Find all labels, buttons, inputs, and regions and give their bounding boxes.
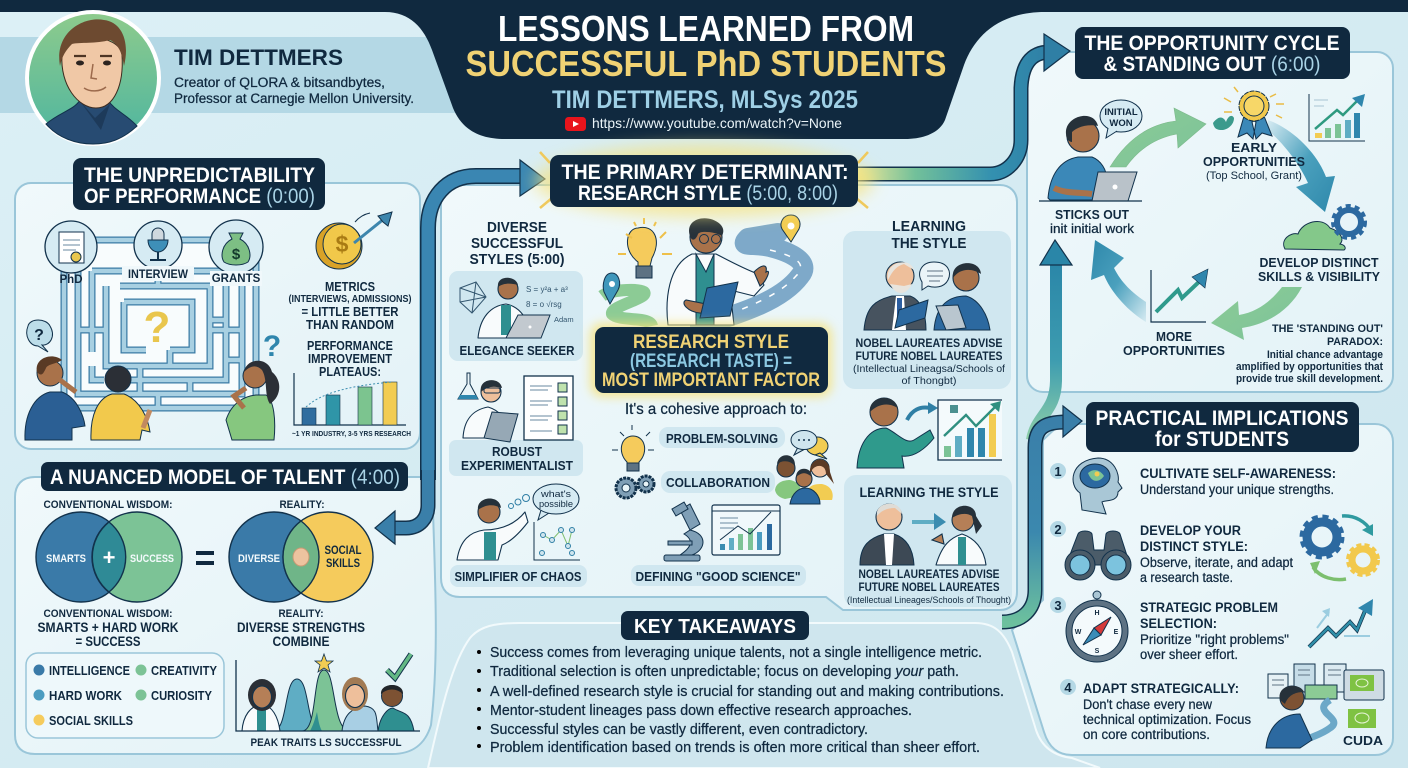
maze question mark: ? <box>144 303 170 352</box>
item 2: DEVELOP YOUR <box>1140 523 1241 538</box>
text: metrics note: = LITTLE BETTER <box>302 304 399 319</box>
connector arrow: up to sticks out <box>1032 240 1072 440</box>
icon: map pins <box>603 215 800 304</box>
illustration: tech focus <box>1266 664 1384 748</box>
text: more opportunities: OPPORTUNITIES <box>1123 344 1225 358</box>
column heading <box>892 219 967 252</box>
person: woman in blue shirt <box>342 677 378 731</box>
item 3 <box>1050 591 1373 662</box>
icon: chat bubbles <box>791 430 828 459</box>
venn: reality: DIVERSE <box>238 553 280 565</box>
venn: conventional wisdom: + <box>103 545 115 570</box>
card: simplifier of chaos: possible <box>539 499 573 510</box>
callout: research style: RESEARCH STYLE <box>633 332 789 353</box>
icon: question mark: ? <box>263 330 281 363</box>
video link: https://www.youtube.com/watch?v=None <box>592 115 842 131</box>
card: elegance seeker: ELEGANCE SEEKER <box>460 343 575 358</box>
callout: research style: (RESEARCH TASTE) = <box>630 351 792 372</box>
legend <box>26 653 224 738</box>
heading: practical implications <box>1086 402 1359 452</box>
caption: conventional wisdom <box>38 608 179 649</box>
person: lead scientist <box>667 218 768 325</box>
legend: INTELLIGENCE <box>49 663 130 678</box>
label: PhD: PhD <box>60 274 82 286</box>
text: metrics note: METRICS <box>325 279 375 294</box>
legend: CREATIVITY <box>151 663 217 678</box>
legend: HARD WORK <box>49 688 123 703</box>
panel: research style <box>441 185 1017 610</box>
heading: nuanced model: A NUANCED MODEL OF TALENT (4:00) <box>50 466 400 489</box>
chart: opportunity growth <box>1309 94 1365 141</box>
text: standing out paradox <box>1236 323 1383 385</box>
connector arrow: to talent panel <box>375 470 428 544</box>
speaker name and bio <box>174 45 414 106</box>
card: nobel lineages <box>843 231 1011 389</box>
bar chart: performance plateaus: ~1 YR INDUSTRY, 3-5 YRS RESEARCH <box>292 429 411 438</box>
card: learning the style: (Intellectual Lineages/Schools of Thought) <box>847 595 1011 606</box>
chart: peak traits <box>236 654 420 749</box>
speaker portrait <box>27 12 159 144</box>
item 3: SELECTION: <box>1140 616 1217 631</box>
pill: defining good science: DEFINING "GOOD SCIENCE" <box>636 569 800 584</box>
item 2: Observe, iterate, and adapt <box>1140 555 1293 570</box>
column: diverse successful styles <box>449 220 587 587</box>
heading: practical implications: PRACTICAL IMPLICATIONS <box>1096 407 1348 430</box>
icon: thought bubble <box>27 320 52 352</box>
caption: reality: REALITY: <box>278 608 324 620</box>
takeaway bullets: Problem identification based on trends is often more critical than sheer effort. <box>490 740 980 756</box>
label: reality: REALITY: <box>280 499 324 511</box>
text: more opportunities: MORE <box>1156 330 1192 344</box>
text: early opportunities: (Top School, Grant) <box>1206 170 1302 182</box>
heading: opportunity cycle: & STANDING OUT (6:00) <box>1104 53 1320 76</box>
pill: collaboration: COLLABORATION <box>666 475 770 490</box>
heading: key takeaways: KEY TAKEAWAYS <box>634 616 796 638</box>
speaker band <box>0 37 470 113</box>
venn: reality <box>229 512 373 602</box>
item 4 <box>1060 664 1384 748</box>
column heading: THE STYLE <box>892 236 967 252</box>
caption: conventional wisdom: = SUCCESS <box>76 634 140 649</box>
card: simplifier of chaos: what's <box>540 489 571 500</box>
heading: opportunity cycle <box>1075 27 1350 79</box>
dark header banner <box>0 0 1408 139</box>
card: robust experimentalist: ROBUST <box>492 444 542 459</box>
icon: idea bulb <box>612 425 654 471</box>
icon: money bag <box>209 220 263 274</box>
text: standing out paradox: Initial chance advantage <box>1267 349 1383 361</box>
text: standing out paradox: amplified by opportunities that <box>1236 361 1383 373</box>
cycle arrow: blue right <box>1268 120 1335 212</box>
item 4: ADAPT STRATEGICALLY: <box>1083 681 1239 696</box>
panel: practical implications <box>1012 424 1393 755</box>
chart: good science <box>712 505 780 555</box>
text: develop distinct skills: DEVELOP DISTINCT <box>1260 256 1379 270</box>
card: learning the style: NOBEL LAUREATES ADVISE <box>858 567 1000 581</box>
item 4: 4 <box>1064 680 1072 695</box>
chart: peak traits: PEAK TRAITS LS SUCCESSFUL <box>250 737 402 749</box>
caption: reality <box>237 608 365 649</box>
item 3: H <box>1094 610 1100 617</box>
card: elegance seeker <box>449 271 583 361</box>
connector arrow: unpredictability to research style <box>327 160 545 480</box>
panel: unpredictability of performance <box>15 183 420 449</box>
item 4: technical optimization. Focus <box>1083 712 1251 727</box>
text: early opportunities <box>1203 141 1305 182</box>
label: conventional wisdom: CONVENTIONAL WISDOM: <box>44 499 172 511</box>
text: sticks out: STICKS OUT <box>1055 208 1129 222</box>
icon: team <box>775 455 834 504</box>
card: nobel lineages: NOBEL LAUREATES ADVISE <box>856 336 1002 350</box>
speech bubble: initial won <box>1100 100 1142 138</box>
takeaway bullets: Mentor-student lineages pass down effective research approaches. <box>490 703 912 719</box>
icon: award ribbon <box>1213 87 1284 139</box>
item 3: Prioritize "right problems" <box>1140 632 1289 647</box>
item 4: on core contributions. <box>1083 727 1210 742</box>
icon: microphone <box>134 221 182 269</box>
icon: coin and dart: $ <box>336 231 349 257</box>
person: woman in lab coat <box>242 679 280 731</box>
venn: conventional wisdom: SUCCESS <box>130 553 174 565</box>
connector arrow: to practical implications <box>1002 406 1082 622</box>
person: blue <box>25 356 85 440</box>
item 3: E <box>1114 629 1119 636</box>
person: man in teal shirt <box>378 685 414 731</box>
venn: conventional wisdom: SMARTS <box>46 553 86 565</box>
caption: reality: COMBINE <box>272 634 330 649</box>
icon: cloud and gear <box>1284 206 1365 250</box>
item 3: W <box>1075 629 1082 636</box>
legend: SOCIAL SKILLS <box>49 713 133 728</box>
speaker name and bio: TIM DETTMERS <box>174 45 343 70</box>
card: robust experimentalist: EXPERIMENTALIST <box>461 458 573 473</box>
text: standing out paradox: provide true skill development. <box>1236 373 1383 385</box>
venn: reality: SOCIAL <box>324 545 362 557</box>
icon: youtube <box>565 117 586 131</box>
text: develop distinct skills <box>1258 256 1381 284</box>
cycle arrow: green bottom <box>1211 287 1302 340</box>
item 2: DISTINCT STYLE: <box>1140 539 1248 554</box>
center column: research style illustration <box>590 215 834 586</box>
heading: unpredictability: THE UNPREDICTABILITY <box>84 164 315 187</box>
icon: winding road <box>602 233 803 326</box>
text: early opportunities: EARLY <box>1231 141 1278 155</box>
takeaway bullets: Success comes from leveraging unique talents, not a single intelligence metric. <box>490 645 982 661</box>
card: learning the style: FUTURE NOBEL LAUREATES <box>858 580 1000 594</box>
item 1: CULTIVATE SELF-AWARENESS: <box>1140 466 1336 481</box>
person with growth chart <box>857 398 1002 468</box>
text: metrics note <box>288 279 412 379</box>
column heading: DIVERSE <box>487 220 547 236</box>
takeaway bullets: Successful styles can be vastly different, even contradictory. <box>490 722 868 738</box>
legend: CURIOSITY <box>151 688 212 703</box>
card: learning the style <box>844 475 1012 607</box>
text: sticks out <box>1050 208 1135 236</box>
cycle arrow: green top <box>1110 108 1206 167</box>
pill: collaboration <box>661 471 775 493</box>
heading: practical implications: for STUDENTS <box>1155 428 1289 451</box>
heading: primary determinant <box>534 145 874 217</box>
card: nobel lineages: FUTURE NOBEL LAUREATES <box>856 349 1002 363</box>
text: metrics note: IMPROVEMENT <box>308 351 392 366</box>
callout: research style: MOST IMPORTANT FACTOR <box>602 370 820 391</box>
pill: problem-solving <box>659 427 785 448</box>
person: green <box>226 361 279 440</box>
label: interview: INTERVIEW <box>128 269 188 281</box>
panel: opportunity cycle <box>1027 52 1393 392</box>
callout: research style <box>590 323 832 397</box>
item 3: S <box>1095 648 1100 655</box>
caption: conventional wisdom: SMARTS + HARD WORK <box>38 620 179 635</box>
heading: primary determinant: THE PRIMARY DETERMINANT: <box>562 161 848 184</box>
text: sticks out: init initial work <box>1050 222 1135 236</box>
item 1: Understand your unique strengths. <box>1140 482 1334 497</box>
icon: money bag: $ <box>232 246 241 263</box>
maze <box>62 237 257 410</box>
text: metrics note: PLATEAUS: <box>319 364 381 379</box>
venn: conventional wisdom <box>36 512 182 602</box>
heading: unpredictability <box>73 158 325 210</box>
item 1 <box>1050 458 1336 514</box>
title line 2: SUCCESSFUL PhD STUDENTS <box>466 43 946 84</box>
person: yellow <box>91 366 150 440</box>
heading: key takeaways <box>621 611 809 640</box>
text: cohesive approach: It's a cohesive approach to: <box>625 401 807 418</box>
card: simplifier of chaos: SIMPLIFIER OF CHAOS <box>454 569 582 584</box>
item 3: 3 <box>1054 598 1062 613</box>
chart: more opportunities <box>1151 269 1208 322</box>
item 2: 2 <box>1054 522 1062 537</box>
item 3: STRATEGIC PROBLEM <box>1140 600 1278 615</box>
title block <box>466 8 946 131</box>
text: standing out paradox: THE 'STANDING OUT' <box>1272 323 1383 335</box>
pill: problem-solving: PROBLEM-SOLVING <box>666 431 778 446</box>
item 3: over sheer effort. <box>1140 647 1238 662</box>
card: robust experimentalist <box>449 373 583 476</box>
bar chart: performance plateaus <box>292 373 411 438</box>
text: early opportunities: OPPORTUNITIES <box>1203 155 1305 169</box>
subtitle: TIM DETTMERS, MLSys 2025 <box>552 86 858 114</box>
takeaway bullets: A well-defined research style is crucial for standing out and making contributions. <box>490 684 1004 700</box>
item 2 <box>1050 516 1378 585</box>
icon: microscope <box>664 502 703 561</box>
caption: conventional wisdom: CONVENTIONAL WISDOM: <box>44 608 172 620</box>
text: metrics note: (INTERVIEWS, ADMISSIONS) <box>288 294 412 305</box>
panel: key takeaways <box>428 611 1100 768</box>
heading: opportunity cycle: THE OPPORTUNITY CYCLE <box>1084 32 1340 55</box>
speech bubble: initial won: INITIAL <box>1104 107 1138 118</box>
connector arrow: research style to opportunity cycle <box>858 34 1070 174</box>
column heading <box>470 220 565 268</box>
equals sign <box>196 551 214 565</box>
heading: unpredictability: OF PERFORMANCE (0:00) <box>84 185 315 208</box>
icon: PhD diploma <box>45 221 97 273</box>
person: sticks out <box>1039 116 1142 201</box>
card: elegance seeker: S = y²a + a³ <box>526 285 568 294</box>
item 2: a research taste. <box>1140 570 1233 585</box>
caption: reality: DIVERSE STRENGTHS <box>237 620 365 635</box>
pill: defining good science <box>631 565 806 586</box>
heading: primary determinant: RESEARCH STYLE (5:00, 8:00) <box>578 182 838 205</box>
column heading: SUCCESSFUL <box>471 236 563 252</box>
item 4: Don't chase every new <box>1083 697 1212 712</box>
card: elegance seeker: Adam <box>554 315 574 324</box>
column: learning the style <box>843 219 1012 607</box>
text: develop distinct skills: SKILLS & VISIBILITY <box>1258 270 1381 284</box>
takeaway bullets <box>477 645 1004 756</box>
venn: reality: SKILLS <box>326 558 360 570</box>
icon: gears <box>616 476 654 498</box>
card: simplifier of chaos <box>450 484 587 587</box>
icon: coin and dart <box>316 212 392 269</box>
text: metrics note: PERFORMANCE <box>307 338 393 353</box>
card: elegance seeker: 8 = o √rsg <box>526 300 562 309</box>
card: nobel lineages: (Intellectual Lineagsa/Schools of <box>853 364 1005 375</box>
text: more opportunities <box>1123 330 1225 358</box>
text: metrics note: THAN RANDOM <box>306 317 394 332</box>
label: grants: GRANTS <box>212 273 261 285</box>
text: standing out paradox: PARADOX: <box>1327 336 1383 348</box>
takeaway bullets: Traditional selection is often unpredictable; focus on developing your path. <box>490 664 959 680</box>
column heading: STYLES (5:00) <box>470 252 565 268</box>
cycle arrow: blue left <box>1091 240 1146 322</box>
speaker name and bio: Creator of QLORA & bitsandbytes, <box>174 75 385 90</box>
speaker name and bio: Professor at Carnegie Mellon University. <box>174 91 414 106</box>
card: nobel lineages: of Thongbt) <box>902 376 956 387</box>
illustration: tech focus: CUDA <box>1343 733 1384 748</box>
speech bubble: initial won: WON <box>1109 118 1133 129</box>
item 1: 1 <box>1054 464 1062 479</box>
title line 1: LESSONS LEARNED FROM <box>498 8 914 49</box>
column heading: LEARNING <box>892 219 966 235</box>
icon: thought bubble: ? <box>34 327 44 344</box>
panel: nuanced model of talent <box>15 477 436 754</box>
card: learning the style: LEARNING THE STYLE <box>860 484 998 500</box>
icon: light bulb <box>618 218 672 278</box>
